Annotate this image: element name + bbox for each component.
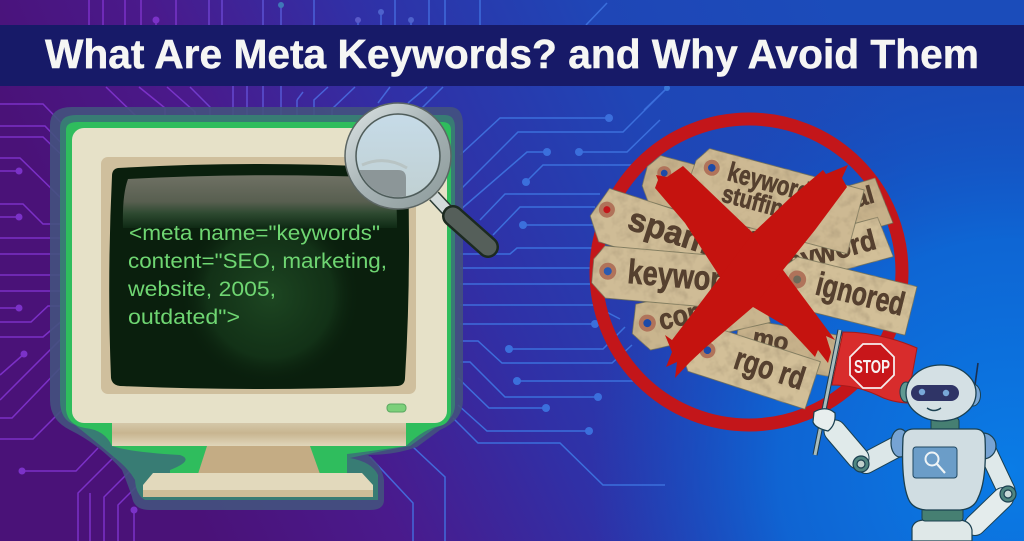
monitor neck [112,420,406,446]
left arm [813,409,909,472]
keyword tags pile [583,145,917,409]
circuit board traces [0,0,667,541]
tag: spam: spam [624,200,716,261]
tag: rgo rd: rgo rd [730,340,810,397]
circuit nodes [16,2,670,514]
flag pole [815,330,840,455]
monitor base [143,473,373,497]
neck [931,418,959,432]
head [906,365,976,421]
monitor casing [72,128,447,423]
tag: keyword stuffing [680,145,864,254]
tag: rgo rd [677,320,820,409]
tag: back left [639,153,743,224]
tag: ignored [774,254,917,335]
meta tag code: <meta name="keywords" [129,221,380,245]
tag: keyword left: keyword [626,253,739,300]
meta tag code: outdated"> [128,305,240,329]
tag: spam [583,185,721,276]
red flag [832,332,917,403]
meta tag code: content="SEO, marketing, [128,249,387,273]
handle [434,196,488,247]
tag: back low [733,318,853,379]
tag: material: material [783,181,877,233]
power LED [387,404,406,412]
screen radial glow [180,205,360,385]
lower body [912,520,972,541]
retro CRT monitor [50,107,463,510]
lens [357,115,439,197]
stroke two [665,165,848,378]
red brush X [655,165,848,378]
title banner [0,25,1024,86]
eyes [919,389,949,396]
monitor stand [198,446,320,474]
meta tag code [127,221,387,329]
screen highlight [123,175,397,228]
waist [922,506,963,521]
tag: keyword stuffing: stuffing [719,180,799,226]
prohibition circle [596,119,902,425]
tag: keyword left [590,245,744,310]
meta tag code: website, 2005, [127,277,276,301]
screen bezel [101,157,416,394]
green glow outline [50,107,463,510]
tag: content: content [656,285,751,337]
torso [903,429,985,510]
dark screen [109,164,409,389]
smile [927,408,941,410]
tag: ignored: ignored [812,265,909,323]
tag: keyword stuffing: keyword [725,157,813,207]
stop sign: STOP [854,357,890,377]
title text: What Are Meta Keywords? and Why Avoid Them [45,31,979,77]
robot mascot with stop flag [813,330,1016,541]
visor [911,385,959,401]
antenna [975,363,978,385]
stop sign [850,344,894,388]
right arm [948,433,1016,541]
tag: back low: mo [751,324,791,357]
stroke one [655,166,835,363]
chest screen [913,447,957,478]
tag: center back [708,200,792,265]
magnifying glass [345,103,488,247]
tag: keyword right: keyword [770,224,879,282]
tag: center back: major, [717,213,773,250]
rim [345,103,451,209]
tag: content [626,276,770,353]
ears [900,382,912,402]
tag: material [750,177,893,260]
